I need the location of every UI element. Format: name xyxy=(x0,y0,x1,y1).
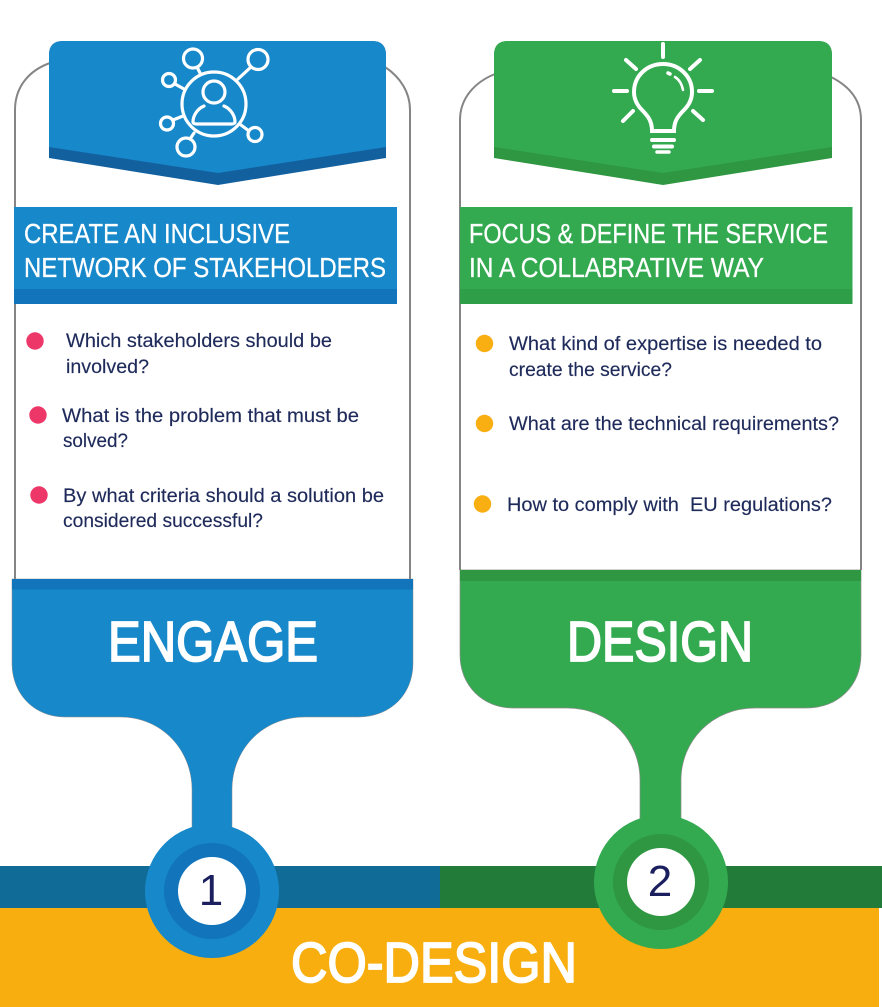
heading band: create an inclusive network: CREATE AN INCLUSIVE xyxy=(24,218,290,249)
question 1: involved? xyxy=(66,357,149,378)
heading band: create an inclusive network xyxy=(14,207,397,304)
heading band: create an inclusive network: NETWORK OF STAKEHOLDERS xyxy=(24,252,386,283)
question 3: considered successful? xyxy=(63,511,263,532)
step marker 1: 1 xyxy=(199,866,223,915)
question list: engage xyxy=(26,331,384,532)
step marker 1 xyxy=(145,824,279,958)
question 3: How to comply with EU regulations? xyxy=(507,495,832,516)
question 2: solved? xyxy=(63,431,128,452)
step marker 2 xyxy=(594,815,728,949)
pin: design label with stem: DESIGN xyxy=(567,610,753,674)
banner: network icon holder xyxy=(49,41,386,185)
question 1: create the service? xyxy=(509,360,672,381)
heading band: focus and define the service xyxy=(460,207,852,304)
question 3 xyxy=(30,486,384,532)
bottom band: co-design base xyxy=(0,866,882,1007)
question 2: What are the technical requirements? xyxy=(509,414,839,435)
title: co-design: CO-DESIGN xyxy=(291,931,577,995)
panel outline: design xyxy=(460,74,861,570)
question 2: What is the problem that must be xyxy=(62,406,359,427)
question 1: What kind of expertise is needed to xyxy=(509,334,822,355)
pin: engage label with stem: ENGAGE xyxy=(108,610,318,674)
icon: light bulb xyxy=(614,44,712,152)
banner: light bulb icon holder xyxy=(494,41,832,185)
question 1 xyxy=(476,334,822,381)
panel: engage xyxy=(12,41,413,958)
question list: design xyxy=(474,334,839,516)
question 1 xyxy=(26,331,332,378)
pin: design label with stem xyxy=(460,570,861,830)
icon: stakeholder network xyxy=(160,49,268,156)
question 3: By what criteria should a solution be xyxy=(63,486,384,507)
pin: engage label with stem xyxy=(12,579,413,840)
panel: design xyxy=(460,41,861,949)
panel outline: engage xyxy=(15,63,410,580)
heading band: focus and define the service: IN A COLLABRATIVE WAY xyxy=(469,252,764,283)
question 2 xyxy=(29,406,359,452)
question 1: Which stakeholders should be xyxy=(66,331,332,352)
step marker 2: 2 xyxy=(648,857,672,906)
